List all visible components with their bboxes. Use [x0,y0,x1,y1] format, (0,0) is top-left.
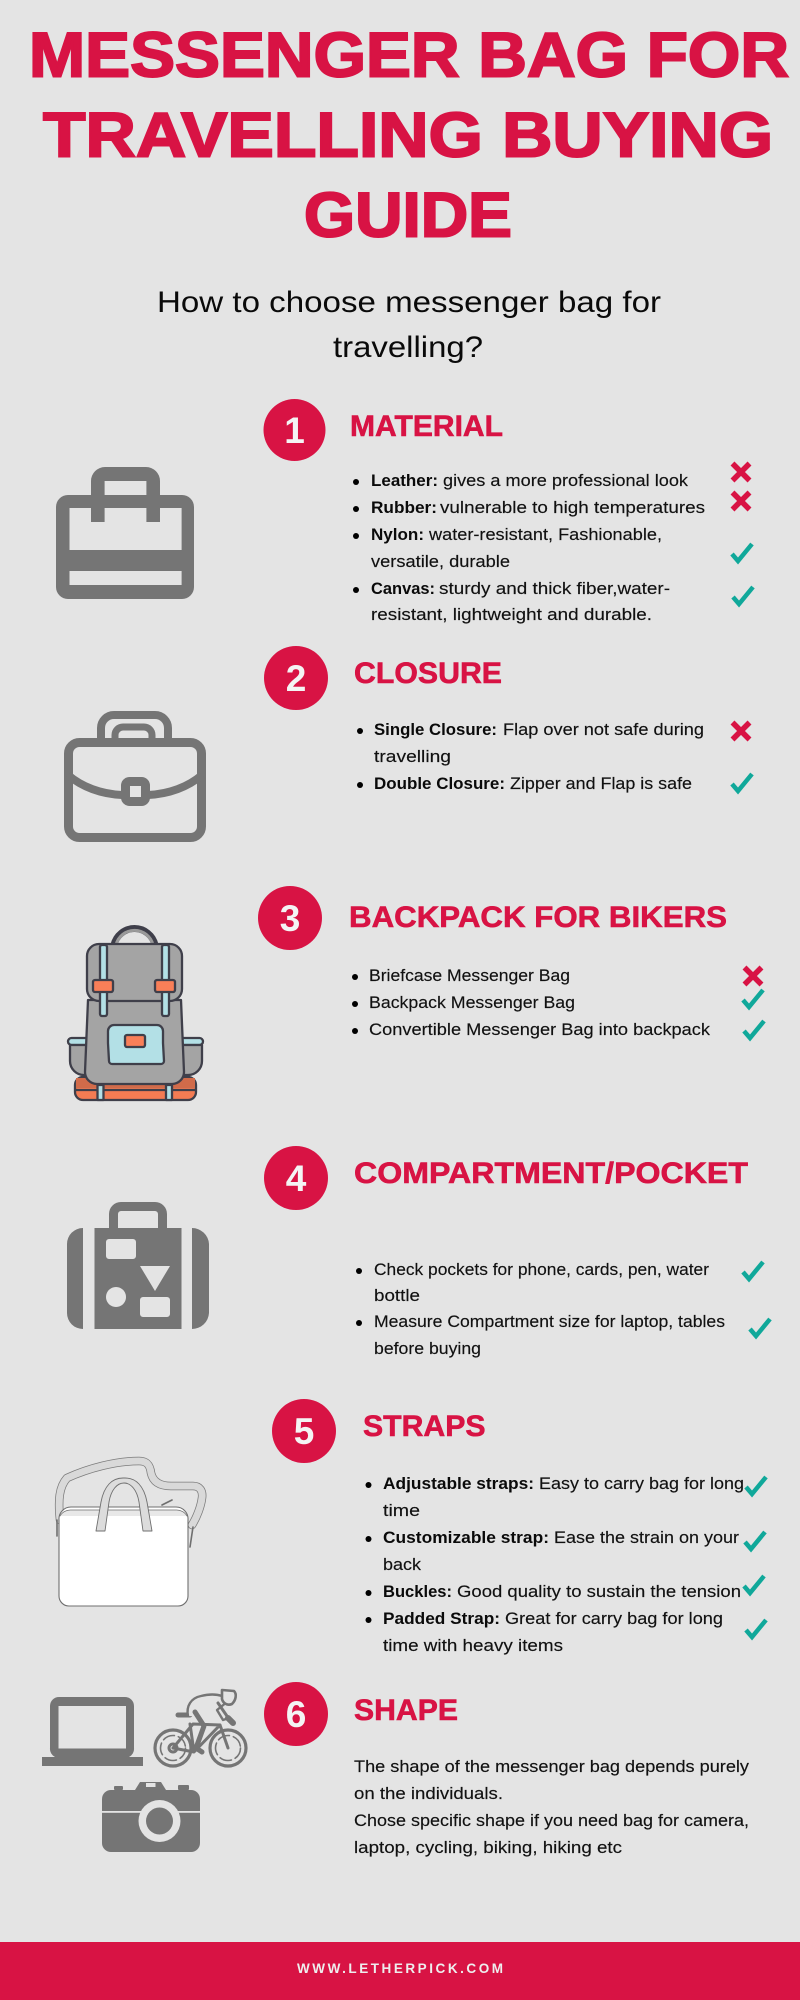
marks: material [732,464,753,604]
text: shape description: The shape of the messenger bag depends purely [354,1757,750,1776]
number badge 2: 2 [286,658,306,699]
marks: compartment [743,1262,770,1336]
list: materials: Canvas: [371,579,435,598]
number badge 4 [264,1146,328,1210]
list: strap features: Ease the strain on your [554,1528,739,1547]
list: strap features: Adjustable straps: [383,1474,534,1493]
list: compartment checks [356,1260,725,1358]
list: backpack types: Backpack Messenger Bag [369,993,575,1012]
panel: shape [42,1682,750,1857]
footer url: WWW.LETHERPICK.COM [297,1961,503,1976]
list: materials: versatile, durable [371,552,510,571]
list: compartment checks: Check pockets for phone, cards, pen, water [374,1260,709,1279]
marks: backpack [743,968,764,1038]
text: shape description [354,1757,750,1857]
icon: backpack [68,929,203,1100]
list: compartment checks: bottle [374,1286,420,1305]
list: closures [357,720,704,793]
marks: straps [744,1477,766,1637]
number badge 5: 5 [294,1411,314,1452]
list: materials [353,471,705,624]
list: strap features: Good quality to sustain the tension [457,1582,741,1601]
list: closures: Flap over not safe during [503,720,704,739]
number badge 4: 4 [286,1158,307,1199]
list: strap features: Padded Strap: [383,1609,500,1628]
list: backpack types: Convertible Messenger Bag into backpack [369,1020,711,1039]
number badge 6: 6 [286,1694,306,1735]
number badge 1: 1 [284,410,305,451]
list: closures: Zipper and Flap is safe [510,774,692,793]
number badge 3: 3 [280,898,300,939]
list: closures: Double Closure: [374,774,505,793]
list: materials: Nylon: [371,525,424,544]
footer band [0,1942,800,2000]
list: closures: Single Closure: [374,720,497,739]
icon: suitcase with stickers [67,1202,209,1329]
icon: tote bag [56,467,194,599]
icon: cyclist [155,1690,246,1766]
heading: material: MATERIAL [350,410,503,443]
number badge 3 [258,886,322,950]
list: strap features: Great for carry bag for long [505,1609,723,1628]
panel: backpack for bikers [68,886,764,1100]
number badge 6 [264,1682,328,1746]
panel: compartment/pocket [67,1146,770,1358]
panel: straps [57,1399,766,1655]
heading: backpack for bikers: BACKPACK FOR BIKERS [349,901,727,934]
text: shape description: on the individuals. [354,1784,503,1803]
title: MESSENGER BAG FOR [29,21,789,91]
list: backpack types: Briefcase Messenger Bag [369,966,570,985]
panel: material [56,399,753,624]
icon: camera [102,1782,200,1852]
list: materials: water-resistant, Fashionable, [428,525,662,544]
list: strap features: time [383,1501,420,1520]
title [29,21,789,251]
icon: briefcase [68,715,202,838]
list: backpack types [352,966,711,1039]
list: materials: vulnerable to high temperatures [440,498,705,517]
text: shape description: Chose specific shape if you need bag for camera, [354,1811,749,1830]
subtitle: travelling? [333,331,483,364]
list: closures: travelling [374,747,451,766]
marks: closure [732,722,752,791]
list: materials: Leather: [371,471,438,490]
title: GUIDE [304,181,512,251]
list: strap features: back [383,1555,422,1574]
number badge 1 [264,399,326,461]
list: materials: sturdy and thick fiber,water- [439,579,670,598]
icon: white shoulder bag [57,1461,202,1606]
list: materials: resistant, lightweight and durable. [371,605,652,624]
icon: laptop [42,1697,143,1766]
list: materials: Rubber: [371,498,437,517]
heading: straps: STRAPS [363,1410,486,1443]
list: strap features: Buckles: [383,1582,452,1601]
list: strap features [366,1474,744,1655]
list: materials: gives a more professional look [443,471,689,490]
number badge 2 [264,646,328,710]
subtitle [157,286,661,364]
number badge 5 [272,1399,336,1463]
text: shape description: laptop, cycling, biking, hiking etc [354,1838,623,1857]
heading: closure: CLOSURE [354,657,502,690]
list: strap features: Customizable strap: [383,1528,549,1547]
list: strap features: time with heavy items [383,1636,563,1655]
subtitle: How to choose messenger bag for [157,286,661,319]
heading: compartment/pocket: COMPARTMENT/POCKET [354,1157,748,1190]
list: strap features: Easy to carry bag for long [539,1474,744,1493]
list: compartment checks: Measure Compartment size for laptop, tables [374,1312,725,1331]
panel: closure [68,646,752,838]
heading: shape: SHAPE [354,1694,458,1727]
list: compartment checks: before buying [374,1339,481,1358]
title: TRAVELLING BUYING [43,101,773,171]
